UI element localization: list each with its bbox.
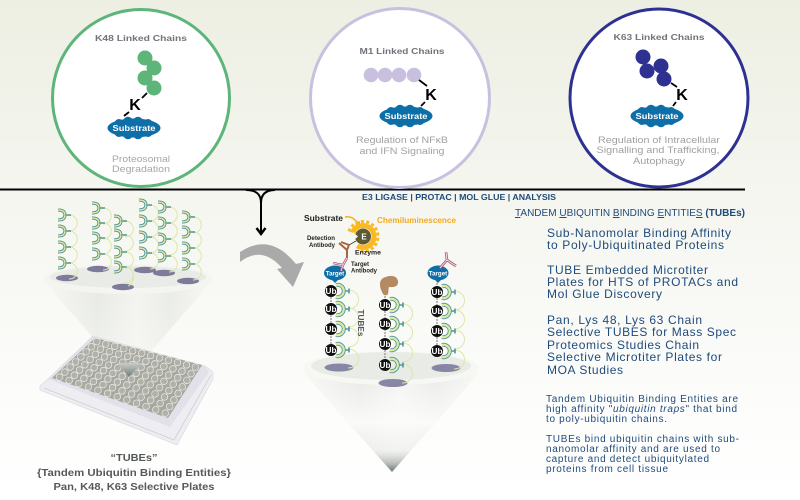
text: K48 function: Degradation: [112, 164, 170, 175]
text: feature list: Proteomics Studies Chain: [547, 338, 699, 352]
text: description: Tandem Ubiquitin Binding Entities are: [546, 394, 738, 405]
icon: target protein left: Target: [326, 270, 344, 278]
icon: target protein right: [428, 266, 448, 283]
text: description: nanomolar affinity and are used to: [546, 444, 720, 455]
text: description: high affinity "ubiquitin traps" that bind: [546, 404, 737, 415]
label: assay annotations: Antibody: [309, 242, 335, 249]
diagram: capture wells: [324, 364, 460, 387]
icon: K48 lysine link: K: [129, 97, 141, 114]
label: assay annotations: Chemiluminescence: [377, 215, 456, 225]
text: feature list: to Poly-Ubiquitinated Proteins: [547, 238, 724, 252]
icon: target protein left: [324, 266, 346, 283]
icon: K48 substrate: Substrate: [112, 124, 156, 133]
arrow: curved grey: [240, 244, 304, 287]
diagram: Ub column 1: Ub: [326, 325, 336, 334]
text: feature list: Pan, Lys 48, Lys 63 Chain: [547, 313, 702, 327]
diagram: Ub column 3: Ub: [432, 307, 442, 316]
caption: plates: [37, 452, 231, 493]
icon: brown protein blob: [380, 276, 398, 295]
icon: detection assembly: E: [361, 232, 367, 242]
label: assay annotations: Target: [351, 261, 370, 268]
text: K63 function: Autophagy: [633, 156, 685, 167]
caption: plates: Pan, K48, K63 Selective Plates: [54, 481, 215, 493]
text: feature list: Plates for HTS of PROTACs and: [547, 275, 738, 289]
diagram: Ub column 3: Ub: [432, 347, 442, 356]
label: assay annotations: Detection: [307, 235, 335, 242]
diagram: Ub column 2: Ub: [380, 361, 390, 370]
diagram: Ub column 3: Ub: [432, 288, 442, 297]
text: M1 function: Regulation of NFκB: [356, 135, 448, 146]
heading: TUBEs: TANDEM UBIQUITIN BINDING ENTITIES (TUBEs): [515, 208, 745, 219]
text: K63 function: Regulation of Intracellular: [598, 135, 720, 146]
icon: detection assembly: [333, 217, 382, 271]
diagram: Ub column 3: [431, 280, 464, 369]
label: assay annotations: Enzyme: [355, 250, 382, 256]
icon: K48 substrate: [108, 117, 160, 139]
text: M1 function: and IFN Signaling: [360, 146, 444, 157]
diagram: microtiter plate: [40, 336, 213, 445]
icon: M1 lysine link: K: [425, 87, 437, 104]
caption: plates: “TUBEs”: [110, 452, 158, 464]
label: TUBEs vertical: TUBEs: [356, 310, 365, 337]
text: description: TUBEs bind ubiquitin chains with sub-: [546, 434, 739, 445]
heading: K63: K63 Linked Chains: [614, 32, 705, 42]
icon: K63 lysine link: K: [676, 87, 688, 104]
label: assay annotations: Substrate: [304, 213, 343, 223]
diagram: Ub column 2: [379, 290, 412, 383]
text: description: to poly-ubiquitin chains.: [546, 414, 667, 425]
panel: M1 linked chains: [310, 8, 490, 188]
icon: K63 substrate: Substrate: [636, 112, 679, 121]
icon: M1 lysine link: [419, 80, 437, 106]
text: feature list: Selective TUBES for Mass Spec: [547, 325, 736, 339]
diagram: Ub column 1: Ub: [326, 305, 336, 314]
caption: plates: {Tandem Ubiquitin Binding Entities}: [37, 467, 231, 479]
diagram: left funnel: [43, 264, 213, 378]
text: description: capture and detect ubiquitylated: [546, 454, 709, 465]
text: feature list: Selective Microtiter Plates for: [547, 350, 722, 364]
icon: target antibody right: [440, 252, 456, 268]
diagram: Ub column 1: Ub: [326, 287, 336, 296]
icon: K48 ubiquitin chain: [138, 50, 162, 96]
icon: K48 lysine link: [124, 93, 147, 116]
diagram: Ub column 3: Ub: [432, 327, 442, 336]
label: assay annotations: Antibody: [351, 268, 377, 274]
icon: K63 ubiquitin chain: [636, 50, 672, 86]
text: M1 function: [356, 135, 448, 157]
text: K48 function: Proteosomal: [112, 154, 170, 165]
icon: target protein right: Target: [429, 270, 447, 278]
heading: M1: M1 Linked Chains: [360, 46, 445, 56]
diagram: Ub column 2: Ub: [380, 320, 390, 329]
diagram: left TUBE columns: [56, 200, 201, 290]
icon: M1 ubiquitin chain: [364, 68, 421, 82]
diagram: Ub column 2: Ub: [380, 301, 390, 310]
arrow: brace into assays: [246, 190, 275, 234]
text: description: [546, 394, 739, 475]
label: applications: E3 LIGASE | PROTAC | MOL GLUE | ANALYSIS: [362, 192, 556, 202]
text: K63 function: [596, 135, 720, 167]
divider line: [0, 188, 745, 190]
text: K48 function: [112, 154, 170, 175]
diagram: Ub column 1: [325, 285, 358, 368]
diagram: right funnel: [303, 351, 480, 472]
diagram: Ub column 2: Ub: [380, 340, 390, 349]
text: description: proteins from cell tissue: [546, 464, 668, 475]
icon: M1 substrate: [380, 105, 432, 127]
text: feature list: MOA Studies: [547, 363, 623, 377]
text: K63 function: Signalling and Trafficking,: [596, 145, 720, 156]
icon: K63 lysine link: [671, 83, 688, 106]
panel: K63 linked chains: [570, 9, 748, 187]
icon: K63 substrate: [630, 105, 684, 127]
heading: K48: K48 Linked Chains: [95, 33, 187, 43]
text: feature list: [547, 226, 738, 377]
text: feature list: Mol Glue Discovery: [547, 287, 662, 301]
panel: K48 linked chains: [52, 10, 230, 186]
text: feature list: TUBE Embedded Microtiter: [547, 263, 708, 277]
diagram: Ub column 1: Ub: [326, 346, 336, 355]
icon: M1 substrate: Substrate: [384, 112, 428, 121]
label: assay annotations: [304, 213, 456, 274]
text: feature list: Sub-Nanomolar Binding Affinity: [547, 226, 731, 240]
